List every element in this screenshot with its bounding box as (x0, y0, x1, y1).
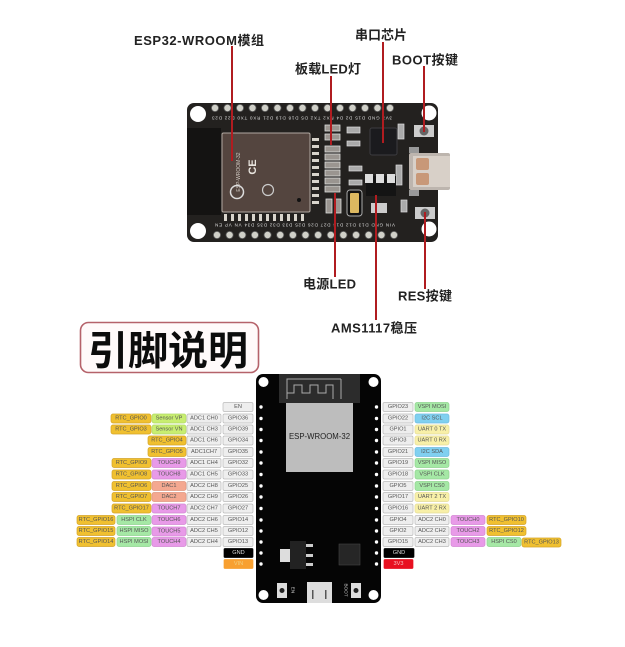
row GPIO13: RTC_GPIO14 (79, 539, 113, 545)
module castellated pads (224, 138, 319, 221)
yellow tantalum capacitor (347, 190, 362, 216)
row GPIO27: ADC2 CH7 (190, 506, 218, 512)
row GPIO39: RTC_GPIO3 (115, 426, 147, 432)
row GPIO12: GPIO12 (228, 528, 248, 534)
row GPIO22 (383, 414, 449, 423)
row GPIO18: GPIO18 (388, 472, 408, 478)
row GPIO26: DAC2 (162, 494, 176, 500)
row GPIO13 (77, 538, 253, 546)
row GPIO25: ADC2 CH8 (190, 483, 218, 489)
row GPIO3: UART 0 RX (417, 438, 447, 444)
callout: ESP32-WROOM module (134, 33, 264, 161)
row GPIO22: I2C SCL (421, 416, 443, 422)
WROOM module (286, 403, 353, 472)
row GPIO14: ADC2 CH6 (190, 517, 218, 523)
row GPIO32: TOUCH9 (158, 460, 180, 466)
row GPIO12: ADC2 CH5 (190, 528, 218, 534)
icon: mounting holes (258, 377, 378, 600)
row GPIO2: RTC_GPIO12 (489, 528, 524, 534)
row GPIO27: RTC_GPIO17 (114, 506, 149, 512)
row GPIO25: DAC1 (162, 483, 176, 489)
row GPIO13: GPIO13 (228, 539, 248, 545)
row EN (223, 402, 253, 412)
row GPIO14: HSPI CLK (121, 517, 147, 523)
row 3V3 (384, 560, 413, 568)
callout: power LED (303, 193, 356, 292)
row GPIO1 (383, 425, 449, 434)
USB serial chip (370, 128, 397, 155)
row GPIO17 (383, 492, 449, 502)
row GPIO36: RTC_GPIO0 (115, 416, 147, 422)
row GPIO33 (112, 470, 253, 479)
row GND: GND (232, 550, 245, 556)
row EN: EN (234, 404, 242, 410)
row GPIO23 (383, 402, 449, 412)
row GPIO32: GPIO32 (228, 460, 248, 466)
row GPIO32: RTC_GPIO9 (116, 460, 147, 466)
row GPIO13: TOUCH4 (158, 539, 180, 545)
callout: onboard LED: 板载LED灯 (295, 62, 361, 76)
row GND (384, 548, 414, 558)
row GPIO39: GPIO39 (228, 426, 248, 432)
callout: serial chip: 串口芯片 (355, 28, 407, 42)
BOOT button (414, 125, 434, 137)
small SMD components (347, 124, 407, 212)
row GPIO36: GPIO36 (228, 416, 248, 422)
left pin dots (259, 405, 263, 566)
row GPIO18 (383, 470, 449, 479)
callout: RES button: RES按键 (398, 288, 452, 304)
LED and resistor column (325, 125, 341, 213)
row GPIO15: RTC_GPIO13 (524, 540, 559, 546)
row GPIO3 (383, 436, 449, 445)
row GPIO13: HSPI MOSI (120, 539, 149, 545)
callout: AMS1117 regulator: AMS1117稳压 (331, 320, 417, 336)
row GPIO33: TOUCH8 (158, 472, 180, 478)
silkscreen pin names top: 3V3 GND D15 D2 D4 RX2 TX2 D5 D18 D19 D21 RX0 TX0 D22 D23 (212, 116, 392, 120)
row GPIO15 (383, 538, 561, 547)
row GPIO33: GPIO33 (228, 472, 248, 478)
row GPIO15: GPIO15 (388, 539, 408, 545)
ESP32 module shield: CE (247, 159, 259, 175)
icon: mounting holes (190, 106, 436, 239)
row GPIO14 (77, 516, 253, 524)
row GPIO36: ADC1 CH0 (190, 416, 218, 422)
row GPIO32: ADC1 CH4 (190, 460, 218, 466)
left pin labels (77, 402, 253, 568)
row GPIO26: ADC2 CH9 (190, 494, 218, 500)
right pin labels (383, 402, 561, 568)
row GPIO14: GPIO14 (228, 517, 248, 523)
row GPIO1: GPIO1 (389, 426, 407, 432)
top header pins (211, 104, 394, 112)
row GPIO36 (111, 414, 253, 423)
row GPIO27: TOUCH7 (158, 506, 180, 512)
row GPIO13: ADC2 CH4 (190, 539, 218, 545)
row GPIO17: UART 2 TX (418, 494, 446, 500)
bottom header pins (213, 231, 398, 239)
row GPIO17: GPIO17 (388, 494, 408, 500)
row GPIO4: ADC2 CH0 (418, 517, 446, 523)
row GPIO2 (383, 526, 526, 536)
row GPIO5 (383, 482, 449, 490)
row GPIO39: ADC1 CH3 (190, 426, 218, 432)
row GND (224, 548, 253, 558)
callout: ESP32-WROOM module: ESP32-WROOM模组 (134, 33, 264, 48)
callout: RES button (398, 212, 452, 304)
BOOT button (344, 583, 361, 598)
row GPIO5: VSPI CS0 (419, 483, 445, 489)
WROOM module: ESP-WROOM-32 (289, 432, 350, 441)
row GPIO4: RTC_GPIO10 (489, 517, 524, 523)
row GPIO25: GPIO25 (228, 483, 248, 489)
BOOT button: BOOT (344, 583, 348, 597)
row GPIO26: RTC_GPIO7 (116, 494, 147, 500)
row GPIO14: RTC_GPIO16 (79, 517, 113, 523)
row GPIO4 (383, 516, 526, 524)
row GPIO18: VSPI CLK (419, 472, 445, 478)
row GPIO12: TOUCH5 (158, 528, 180, 534)
row GPIO23: GPIO23 (388, 404, 408, 410)
row GPIO33: RTC_GPIO8 (116, 472, 147, 478)
row GPIO19: VSPI MISO (418, 460, 447, 466)
row GPIO1: UART 0 TX (418, 426, 446, 432)
serial chip (339, 544, 360, 565)
voltage regulator (280, 541, 313, 569)
row 3V3: 3V3 (394, 561, 403, 567)
ESP32 module shield: ESP-WROOM-32 (236, 152, 242, 192)
row GPIO34: GPIO34 (228, 438, 248, 444)
callout: power LED: 电源LED (303, 276, 356, 292)
ESP32 module shield (222, 133, 310, 212)
row GPIO4: GPIO4 (389, 517, 407, 523)
row GPIO2: GPIO2 (389, 528, 407, 534)
row GPIO39: Sensor VN (155, 426, 183, 432)
row GPIO22: GPIO22 (388, 416, 408, 422)
row GPIO15: TOUCH3 (457, 539, 479, 545)
row GPIO4: TOUCH0 (457, 517, 479, 523)
row GPIO19: GPIO19 (388, 460, 408, 466)
row GPIO23: VSPI MOSI (418, 404, 447, 410)
EN button: EN (290, 587, 296, 593)
row GPIO25: RTC_GPIO6 (116, 483, 147, 489)
callout: onboard LED (295, 62, 361, 145)
row GPIO26: GPIO26 (228, 494, 248, 500)
pinout board diagram (256, 374, 381, 603)
row GPIO34 (148, 436, 253, 445)
row GPIO15: ADC2 CH3 (418, 539, 446, 545)
EN button (277, 583, 296, 598)
row VIN (224, 560, 253, 568)
row GPIO15: HSPI CS0 (491, 539, 517, 545)
row GPIO27: GPIO27 (228, 506, 248, 512)
row GPIO26 (112, 492, 253, 502)
RES button (415, 207, 435, 219)
row GPIO2: TOUCH2 (457, 528, 479, 534)
row GND: GND (393, 550, 405, 556)
USB-C connector (409, 147, 450, 196)
row GPIO21 (383, 448, 449, 456)
row GPIO35 (148, 448, 253, 456)
row GPIO12: HSPI MISO (120, 528, 149, 534)
row GPIO16: GPIO16 (388, 506, 408, 512)
row GPIO16: UART 2 RX (417, 506, 447, 512)
callout: BOOT button: BOOT按键 (392, 52, 458, 68)
row GPIO12 (77, 526, 253, 536)
row GPIO35: ADC1CH7 (191, 449, 217, 455)
row GPIO25 (112, 482, 253, 490)
row GPIO34: ADC1 CH6 (190, 438, 218, 444)
row VIN: VIN (234, 561, 243, 567)
row GPIO2: ADC2 CH2 (418, 528, 446, 534)
callout: serial chip (355, 28, 407, 143)
heading: pin description: 引脚说明 (88, 318, 248, 376)
row GPIO19 (383, 458, 449, 468)
row GPIO21: I2C SDA (421, 449, 443, 455)
row GPIO36: Sensor VP (156, 416, 183, 422)
row GPIO27 (112, 504, 253, 513)
photo of ESP32 dev board (187, 103, 450, 242)
row GPIO35: RTC_GPIO5 (151, 449, 183, 455)
row GPIO35: GPIO35 (228, 449, 248, 455)
row GPIO3: GPIO3 (389, 438, 407, 444)
row GPIO5: GPIO5 (389, 483, 407, 489)
micro USB port (307, 582, 332, 603)
antenna area (279, 374, 360, 403)
row GPIO16 (383, 504, 449, 513)
row GPIO12: RTC_GPIO15 (79, 528, 113, 534)
row GPIO33: ADC1 CH5 (190, 472, 218, 478)
row GPIO21: GPIO21 (388, 449, 408, 455)
right pin dots (375, 405, 378, 566)
callout: BOOT button (392, 52, 458, 132)
row GPIO14: TOUCH6 (158, 517, 180, 523)
silkscreen pin names bottom: VIN GND D13 D12 D14 D27 D26 D25 D33 D32 D35 D34 VN VP EN (215, 222, 395, 228)
row GPIO39 (111, 425, 253, 434)
AMS1117 regulator (365, 174, 396, 213)
row GPIO34: RTC_GPIO4 (151, 438, 183, 444)
row GPIO32 (112, 458, 253, 468)
